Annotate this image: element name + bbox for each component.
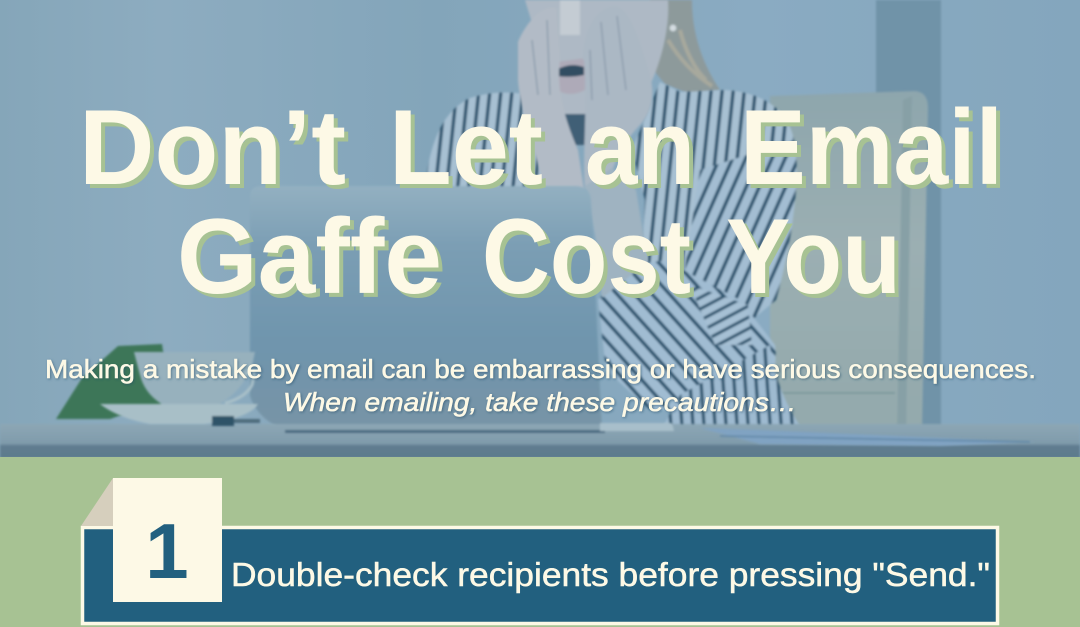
title: Email — [740, 87, 1003, 207]
striped shirt — [425, 82, 800, 432]
title: Don’t — [79, 87, 346, 207]
title: Gaffe — [177, 196, 442, 316]
subtitle — [45, 354, 1036, 417]
title: Let — [389, 87, 543, 207]
window column — [876, 0, 941, 445]
coffee cup and saucer — [100, 352, 260, 426]
papers — [700, 428, 1035, 446]
title: Gaffe — [181, 200, 446, 320]
tip 1 banner — [81, 478, 998, 624]
title: You — [730, 200, 905, 320]
right hand — [583, 6, 652, 190]
laptop — [250, 186, 602, 430]
title: an — [585, 87, 695, 207]
table — [0, 423, 1080, 458]
chair — [770, 91, 928, 436]
title: Cost — [482, 196, 691, 316]
subtitle: Making a mistake by email can be embarrassing or have serious consequences. — [45, 354, 1036, 384]
title: You — [726, 196, 901, 316]
subtitle: When emailing, take these precautions… — [283, 387, 797, 417]
collar and chest — [632, 82, 794, 300]
cuff folds — [690, 285, 752, 345]
plant — [56, 344, 172, 419]
lower shirt — [660, 345, 800, 432]
left shoulder — [425, 92, 545, 190]
green section background — [0, 457, 1080, 627]
title: an — [589, 91, 699, 211]
hero photo: woman covering her face at a laptop — [0, 0, 1080, 458]
folded sleeve — [598, 261, 776, 410]
tip text: Double-check recipients before pressing "Send." — [231, 556, 990, 593]
number tab — [113, 478, 222, 602]
title: Let — [393, 91, 547, 211]
right arm stripes — [680, 140, 797, 330]
forearm — [585, 168, 648, 298]
hair — [645, 0, 720, 94]
title: Don’t — [83, 91, 350, 211]
title: Cost — [486, 200, 695, 320]
face and hands — [518, 0, 676, 298]
title — [79, 87, 1007, 320]
number 1: 1 — [145, 507, 189, 595]
left hand — [518, 8, 584, 190]
title: Email — [744, 91, 1007, 211]
folded tab corner — [81, 478, 113, 526]
